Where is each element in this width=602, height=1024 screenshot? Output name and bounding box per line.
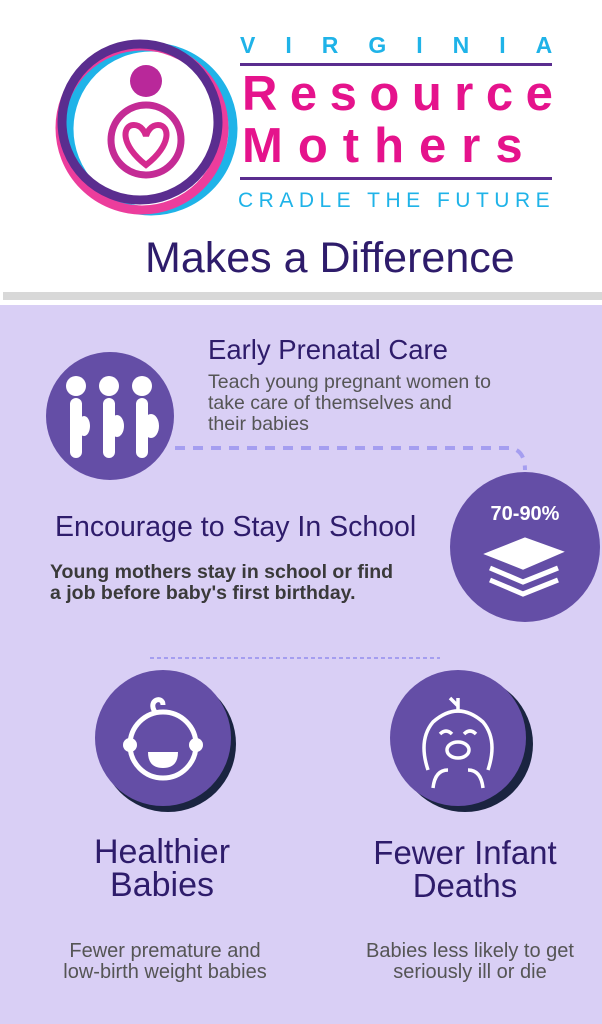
- text: deaths: seriously ill or die: [393, 961, 547, 983]
- logo text: Resource: [242, 67, 565, 121]
- text: healthier: [63, 940, 267, 983]
- text: deaths: Babies less likely to get: [366, 940, 574, 962]
- heading: fewer infant deaths: Fewer Infant: [373, 834, 557, 871]
- stat circle 70-90%: [450, 472, 600, 622]
- text: deaths: [366, 940, 574, 983]
- heading: healthier babies: Healthier: [94, 833, 230, 871]
- heading: healthier babies: Babies: [110, 866, 214, 904]
- logo text: VIRGINIA: [240, 32, 582, 58]
- heading: stay in school: Encourage to Stay In School: [55, 511, 416, 543]
- stat circle 70-90%: 70-90%: [491, 503, 560, 525]
- heading: fewer infant deaths: [373, 834, 557, 904]
- connector dashes: [150, 446, 527, 659]
- logo emblem: [56, 40, 238, 216]
- icon: crying baby: [390, 670, 533, 812]
- icon: happy baby: [95, 670, 236, 812]
- text: school: [50, 561, 393, 604]
- text: prenatal: [208, 371, 491, 435]
- text: school: a job before baby's first birthday.: [50, 582, 356, 604]
- text: school: Young mothers stay in school or find: [50, 561, 393, 583]
- main panel: [0, 305, 602, 1024]
- heading: healthier babies: [94, 833, 230, 904]
- text: healthier: Fewer premature and: [69, 940, 261, 962]
- logo text: Mothers: [242, 119, 538, 173]
- text: prenatal: their babies: [208, 413, 309, 435]
- heading: fewer infant deaths: Deaths: [413, 867, 517, 904]
- heading: early prenatal care: Early Prenatal Care: [208, 334, 448, 365]
- text: prenatal: Teach young pregnant women to: [208, 371, 491, 393]
- logo text: [238, 32, 582, 212]
- subtitle: Makes a Difference: [145, 234, 515, 282]
- icon: pregnant women circle: [46, 352, 174, 480]
- text: prenatal: take care of themselves and: [208, 392, 452, 414]
- logo text: CRADLE THE FUTURE: [238, 189, 555, 212]
- text: healthier: low-birth weight babies: [63, 961, 267, 983]
